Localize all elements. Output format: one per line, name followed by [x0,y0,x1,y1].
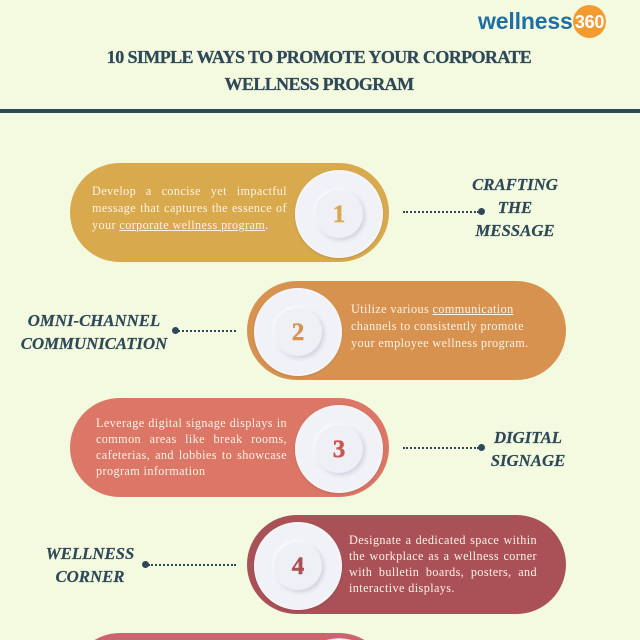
step 4 description: interactive displays. [349,581,455,595]
step 1 description: message that captures the essence of [92,201,287,215]
step 3 description: common areas like break rooms, [96,432,287,446]
step 4 label [46,544,134,586]
step 1 connector [403,208,485,215]
step 3 description [96,416,287,478]
step 1 description [92,184,287,232]
step 2 description: your employee wellness program. [351,336,529,350]
step 4 number badge [254,522,342,610]
step 2 label: COMMUNICATION [21,334,167,353]
title divider [0,109,640,113]
step 2 panel [247,281,566,380]
step 3 description: Leverage digital signage displays in [96,416,287,430]
step 4 description [349,533,537,595]
step 2 label: OMNI-CHANNEL [28,311,160,330]
step 1 panel [70,163,389,262]
step 3 description: cafeterias, and lobbies to showcase [96,448,287,462]
step 3 number badge [295,405,383,493]
step 1 label: CRAFTING [472,175,558,194]
step 3 label: SIGNAGE [491,451,565,470]
step 2 description: Utilize various communication [351,302,514,316]
title: WELLNESS PROGRAM [225,74,413,94]
title [107,47,531,94]
step 4 connector [142,561,236,568]
step 3 label [491,428,565,470]
step 2 description [351,302,529,350]
step 1 number badge [295,170,383,258]
step 3 panel [70,398,389,497]
step 1 description: Develop a concise yet impactful [92,184,287,198]
step 3 label: DIGITAL [494,428,562,447]
logo number: 360 [575,12,604,32]
step 3 description: program information [96,464,205,478]
step 4 label: CORNER [55,567,124,586]
step 4 description: with bulletin boards, posters, and [349,565,537,579]
step 4 label: WELLNESS [46,544,134,563]
logo [478,5,606,38]
step 2 connector [172,327,236,334]
step 2 description: channels to consistently promote [351,319,524,333]
title: 10 SIMPLE WAYS TO PROMOTE YOUR CORPORATE [107,47,531,67]
step 1 label: MESSAGE [475,221,555,240]
step 3 connector [403,444,485,451]
step 1 label: THE [498,198,532,217]
step 4 description: the workplace as a wellness corner [349,549,537,563]
step 2 number badge: 2 [292,319,304,346]
step 4 panel [247,515,566,614]
logo wordmark: wellness [478,8,573,34]
step 1 label [472,175,558,240]
step 5 panel [94,633,364,640]
step 4 description: Designate a dedicated space within [349,533,537,547]
logo badge [573,5,606,38]
step 2 label [21,311,168,353]
step 4 number badge: 4 [292,553,304,580]
step 1 description: your corporate wellness program. [92,218,269,232]
step 1 number badge: 1 [333,201,345,228]
step 3 number badge: 3 [333,436,345,463]
step 2 number badge [254,288,342,376]
